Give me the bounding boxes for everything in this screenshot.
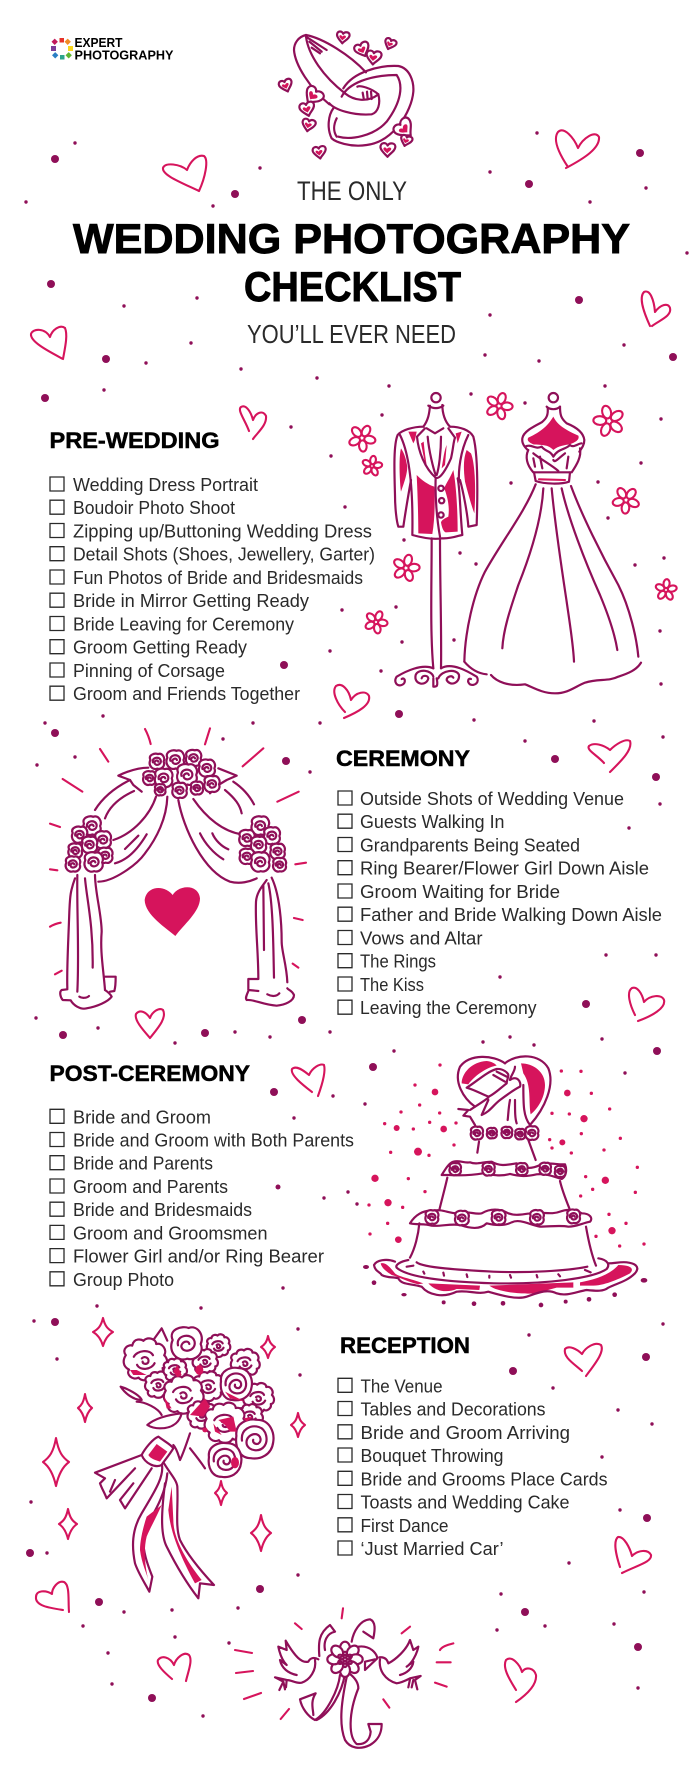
- crimson fills: [381, 1061, 632, 1294]
- checklist items: The Rings: [360, 951, 436, 972]
- cake outlines: [374, 1056, 637, 1298]
- heart: [158, 1654, 191, 1681]
- heart: [334, 685, 369, 718]
- checklist items: Bride and Bridesmaids: [73, 1199, 252, 1220]
- checklist items: [338, 788, 662, 1018]
- checklist items: Outside Shots of Wedding Venue: [360, 788, 624, 809]
- roses: [124, 1327, 274, 1477]
- checklist items: Wedding Dress Portrait: [73, 474, 258, 495]
- checklist items: Groom and Friends Together: [73, 683, 300, 704]
- panel: pre-wedding checklist: [50, 428, 375, 704]
- heart: [145, 887, 200, 936]
- checklist items: [50, 1106, 354, 1290]
- icon: colour ring: [51, 38, 73, 60]
- panel: post-ceremony checklist: [50, 1061, 354, 1290]
- heart: [556, 130, 599, 168]
- checklist items: Bride and Parents: [73, 1153, 213, 1174]
- illustration: wedding cake: [363, 1056, 647, 1307]
- checklist items: Ring Bearer/Flower Girl Down Aisle: [360, 858, 649, 879]
- title line: you'll ever need: YOU’LL EVER NEED: [247, 319, 456, 349]
- checklist items: Guests Walking In: [360, 811, 504, 832]
- checklist items: The Venue: [360, 1375, 442, 1396]
- crimson petal accents: [130, 1365, 253, 1468]
- heart: [136, 1009, 164, 1038]
- heart: [240, 406, 266, 439]
- panel: reception checklist: [338, 1333, 608, 1559]
- checklist items: Bride Leaving for Ceremony: [73, 614, 295, 634]
- checklist items: Bride and Groom with Both Parents: [73, 1130, 354, 1150]
- heading: post-ceremony: POST-CEREMONY: [50, 1061, 250, 1086]
- plate dots: [363, 1265, 647, 1307]
- suit outlines: [394, 393, 478, 687]
- illustration: wedding dress on mannequin: [464, 393, 641, 693]
- checklist items: Groom and Parents: [73, 1176, 228, 1197]
- rosette: [327, 1642, 363, 1677]
- bodice fill: [528, 417, 579, 450]
- checklist items: Bouquet Throwing: [360, 1445, 504, 1466]
- checklist items: Group Photo: [73, 1269, 174, 1290]
- checklist items: [50, 474, 375, 704]
- heart: [642, 292, 670, 326]
- checklist items: [338, 1375, 608, 1559]
- heading: pre-wedding: PRE-WEDDING: [50, 428, 220, 453]
- illustration: flowers around mannequins: [343, 388, 678, 637]
- checklist items: Bride in Mirror Getting Ready: [73, 590, 310, 611]
- heading: ceremony: CEREMONY: [336, 746, 470, 771]
- checklist items: Grandparents Being Seated: [360, 834, 580, 856]
- illustration: doves with ribbon: [235, 1608, 453, 1748]
- heart: [292, 1065, 325, 1096]
- checklist items: Zipping up/Buttoning Wedding Dress: [73, 520, 372, 542]
- checklist items: Pinning of Corsage: [73, 660, 225, 681]
- heart: [36, 1582, 69, 1612]
- checklist items: Tables and Decorations: [360, 1398, 546, 1420]
- heart: [629, 988, 664, 1021]
- checklist items: Leaving the Ceremony: [360, 997, 537, 1018]
- sash accent: [539, 478, 565, 481]
- checklist items: The Kiss: [360, 974, 424, 995]
- checklist items: Fun Photos of Bride and Bridesmaids: [73, 567, 363, 588]
- checklist items: Boudoir Photo Shoot: [73, 497, 235, 518]
- title line: wedding photography: WEDDING PHOTOGRAPHY: [73, 215, 630, 262]
- logo wordmark: EXPERT: [74, 36, 123, 50]
- illustration: sparkles around bouquet: [43, 1318, 305, 1551]
- checklist items: Groom Waiting for Bride: [360, 881, 560, 902]
- heart: [565, 1344, 602, 1376]
- title block: [73, 176, 630, 349]
- checklist items: Vows and Altar: [360, 928, 482, 948]
- checklist items: Flower Girl and/or Ring Bearer: [73, 1246, 324, 1267]
- illustration: wedding rings with hearts: [278, 31, 418, 159]
- heart: [163, 156, 206, 191]
- rays: [50, 728, 306, 974]
- drapes: [60, 768, 294, 1009]
- crimson speckle dots: [367, 1063, 646, 1248]
- logo wordmark: PHOTOGRAPHY: [74, 49, 174, 63]
- illustration: groom suit on mannequin: [394, 393, 478, 687]
- checklist items: Toasts and Wedding Cake: [360, 1492, 570, 1512]
- title line: checklist: CHECKLIST: [244, 263, 461, 310]
- checklist items: Detail Shots (Shoes, Jewellery, Garter): [73, 544, 375, 565]
- checklist items: Groom and Groomsmen: [73, 1222, 268, 1243]
- wrap and ribbon outlines: [95, 1328, 214, 1598]
- suit colour fills: [400, 432, 475, 534]
- dress outlines: [464, 393, 641, 693]
- crimson wrap and ribbon fills: [140, 1444, 202, 1583]
- checklist items: Bride and Groom: [73, 1106, 211, 1127]
- checklist items: Bride and Groom Arriving: [360, 1422, 570, 1443]
- rays: [235, 1608, 453, 1719]
- checklist items: ‘Just Married Car’: [360, 1538, 504, 1559]
- checklist items: Father and Bride Walking Down Aisle: [360, 904, 662, 925]
- title line: the only: THE ONLY: [297, 176, 407, 206]
- heading: reception: RECEPTION: [340, 1333, 470, 1358]
- floral clusters: [66, 750, 286, 872]
- garlands: [425, 1126, 580, 1225]
- small hearts: [278, 31, 418, 159]
- heart: [615, 1537, 651, 1573]
- logo: Expert Photography: [51, 36, 174, 63]
- heart: [505, 1659, 536, 1702]
- checklist items: Groom Getting Ready: [73, 637, 248, 658]
- checklist items: Bride and Grooms Place Cards: [360, 1468, 608, 1489]
- doves and ribbon: [275, 1619, 421, 1748]
- illustration: flower arch with heart: [50, 728, 306, 1009]
- panel: ceremony checklist: [336, 746, 662, 1018]
- illustration: bridal bouquet: [95, 1327, 274, 1598]
- logo wordmark: [74, 36, 174, 63]
- checklist items: First Dance: [360, 1515, 448, 1536]
- heart: [588, 740, 630, 772]
- heart: [31, 327, 66, 359]
